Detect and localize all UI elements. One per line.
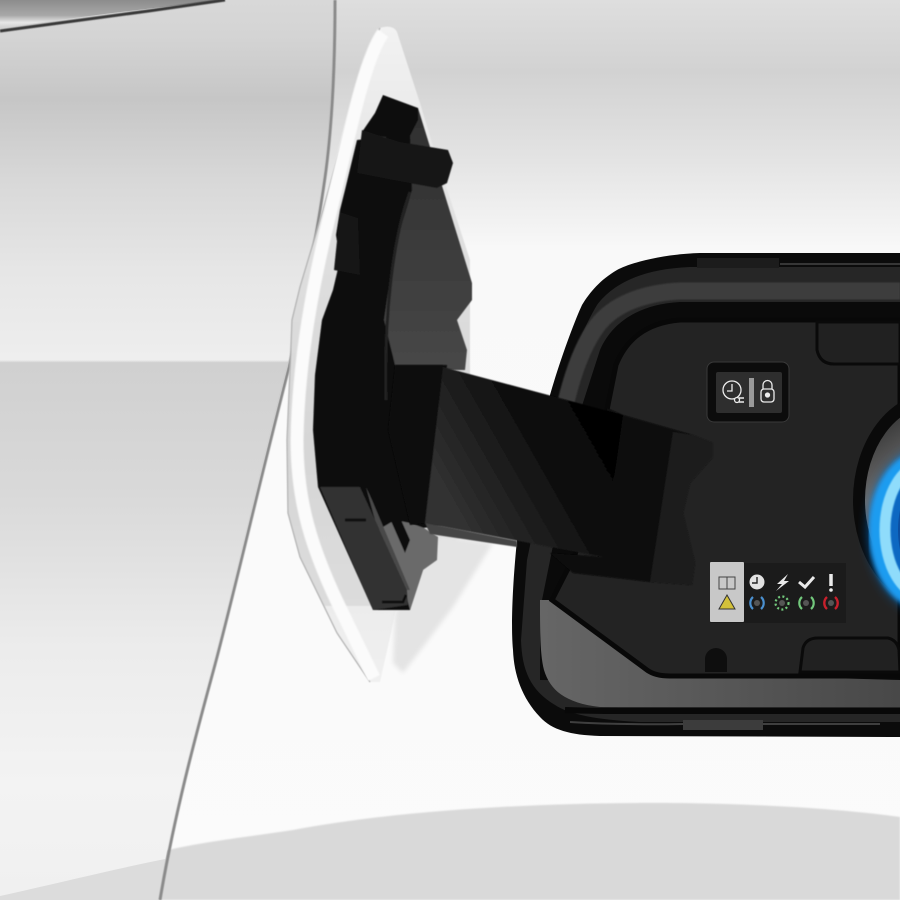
flap assembly: [313, 95, 472, 610]
lower seal line right: [763, 723, 880, 725]
flap corner slot: [382, 595, 406, 602]
flap body inset: [334, 212, 360, 275]
recess frame band: [521, 267, 900, 722]
status light: green: [799, 597, 814, 609]
lower seal line left: [570, 722, 683, 724]
status light: blue: [750, 597, 764, 609]
charging socket with blue light: [853, 392, 900, 612]
notch top right: [817, 322, 900, 364]
icon: clock: [750, 574, 764, 590]
recess outer frame: [512, 253, 900, 737]
flap latch upper: [362, 95, 418, 142]
hinge arm: [388, 365, 713, 585]
flap band mid line: [345, 518, 366, 522]
warning panel: [710, 562, 744, 622]
switch divider: [749, 378, 754, 407]
icon: manual book: [719, 577, 735, 589]
small hole: [705, 648, 727, 672]
arm right lighter segment: [650, 432, 713, 585]
upper slot: [697, 258, 779, 268]
flap groove light edge: [386, 192, 410, 400]
status light: green dotted: [776, 596, 788, 610]
flap band light inner: [366, 487, 410, 590]
recess upper rim highlight: [565, 291, 900, 406]
lower slot: [683, 720, 763, 730]
flap grey face: [370, 108, 472, 370]
charging recess: [512, 253, 900, 737]
icon: warning triangle: [719, 595, 735, 609]
flap glass bright edge: [297, 33, 383, 678]
status label sticker: [710, 562, 846, 623]
lower body shadow curve: [150, 803, 900, 900]
recess inner black ring: [540, 302, 900, 682]
door shut-line: [160, 0, 335, 900]
notch bottom: [800, 638, 900, 672]
flap black body: [313, 135, 443, 610]
arm dark hinge block: [388, 365, 447, 525]
icon: check: [799, 577, 814, 587]
timer and lock switch: [707, 362, 789, 422]
flap lower dark band: [320, 487, 408, 610]
icon: padlock: [761, 380, 774, 402]
flap groove lower: [363, 450, 410, 553]
door window trim: [0, 0, 225, 28]
door trim dark line: [0, 0, 225, 31]
flap outer glass panel: [287, 27, 493, 682]
arm rear dark segment: [550, 408, 713, 585]
status light: red: [824, 597, 838, 609]
recess inner panel: [552, 320, 900, 676]
reflection below flap: [393, 535, 493, 673]
left door panel: [0, 0, 333, 900]
upper seal line: [780, 263, 900, 265]
icon: exclamation: [829, 574, 833, 586]
icon: lightning: [776, 574, 789, 591]
icon: clock with plug: [723, 381, 744, 402]
flap latch horizontal: [357, 130, 453, 188]
recess grey floor lip: [540, 600, 900, 707]
flap glass grey outline: [287, 28, 380, 682]
door lower shadow: [0, 858, 170, 900]
lower black lip line: [565, 710, 900, 711]
flap lower grey corner: [378, 520, 438, 610]
arm under lip: [425, 523, 517, 547]
arm main face: [425, 367, 623, 557]
